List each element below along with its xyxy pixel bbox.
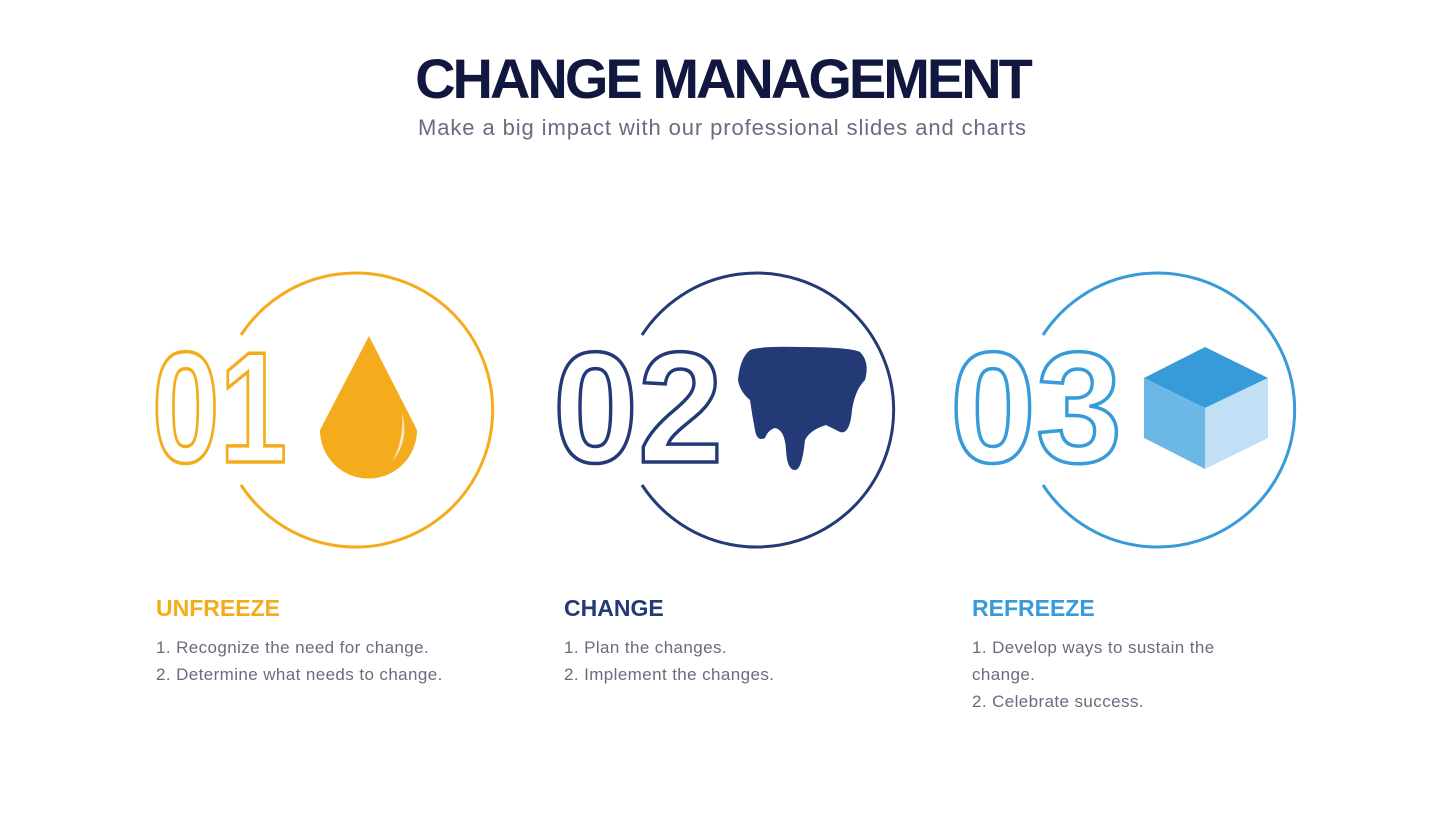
- title: CHANGE MANAGEMENT: [415, 47, 1030, 110]
- text: refreeze: [972, 638, 1215, 711]
- text: refreeze: 1. Develop ways to sustain the change.: [972, 638, 1215, 684]
- text: unfreeze: [156, 638, 443, 684]
- step 2 graphic: 02: [553, 320, 723, 496]
- heading: unfreeze: UNFREEZE: [156, 595, 280, 621]
- step 3 graphic: 03: [950, 320, 1122, 496]
- heading: refreeze: REFREEZE: [972, 595, 1095, 621]
- subtitle: Make a big impact with our professional slides and charts: [418, 115, 1027, 140]
- icon: cube: [1144, 347, 1268, 469]
- text: unfreeze: 2. Determine what needs to change.: [156, 665, 443, 684]
- text: change: 2. Implement the changes.: [564, 665, 774, 684]
- text: unfreeze: 1. Recognize the need for change.: [156, 638, 429, 657]
- step 2 graphic: [553, 273, 894, 547]
- step 1 graphic: [152, 273, 493, 547]
- icon: drop: [320, 336, 417, 479]
- text: refreeze: 2. Celebrate success.: [972, 692, 1144, 711]
- text: change: [564, 638, 774, 684]
- step 3 graphic: [950, 273, 1295, 547]
- step 1 graphic: 01: [152, 320, 287, 496]
- icon: melting: [738, 347, 867, 470]
- heading: change: CHANGE: [564, 595, 664, 621]
- text: change: 1. Plan the changes.: [564, 638, 727, 657]
